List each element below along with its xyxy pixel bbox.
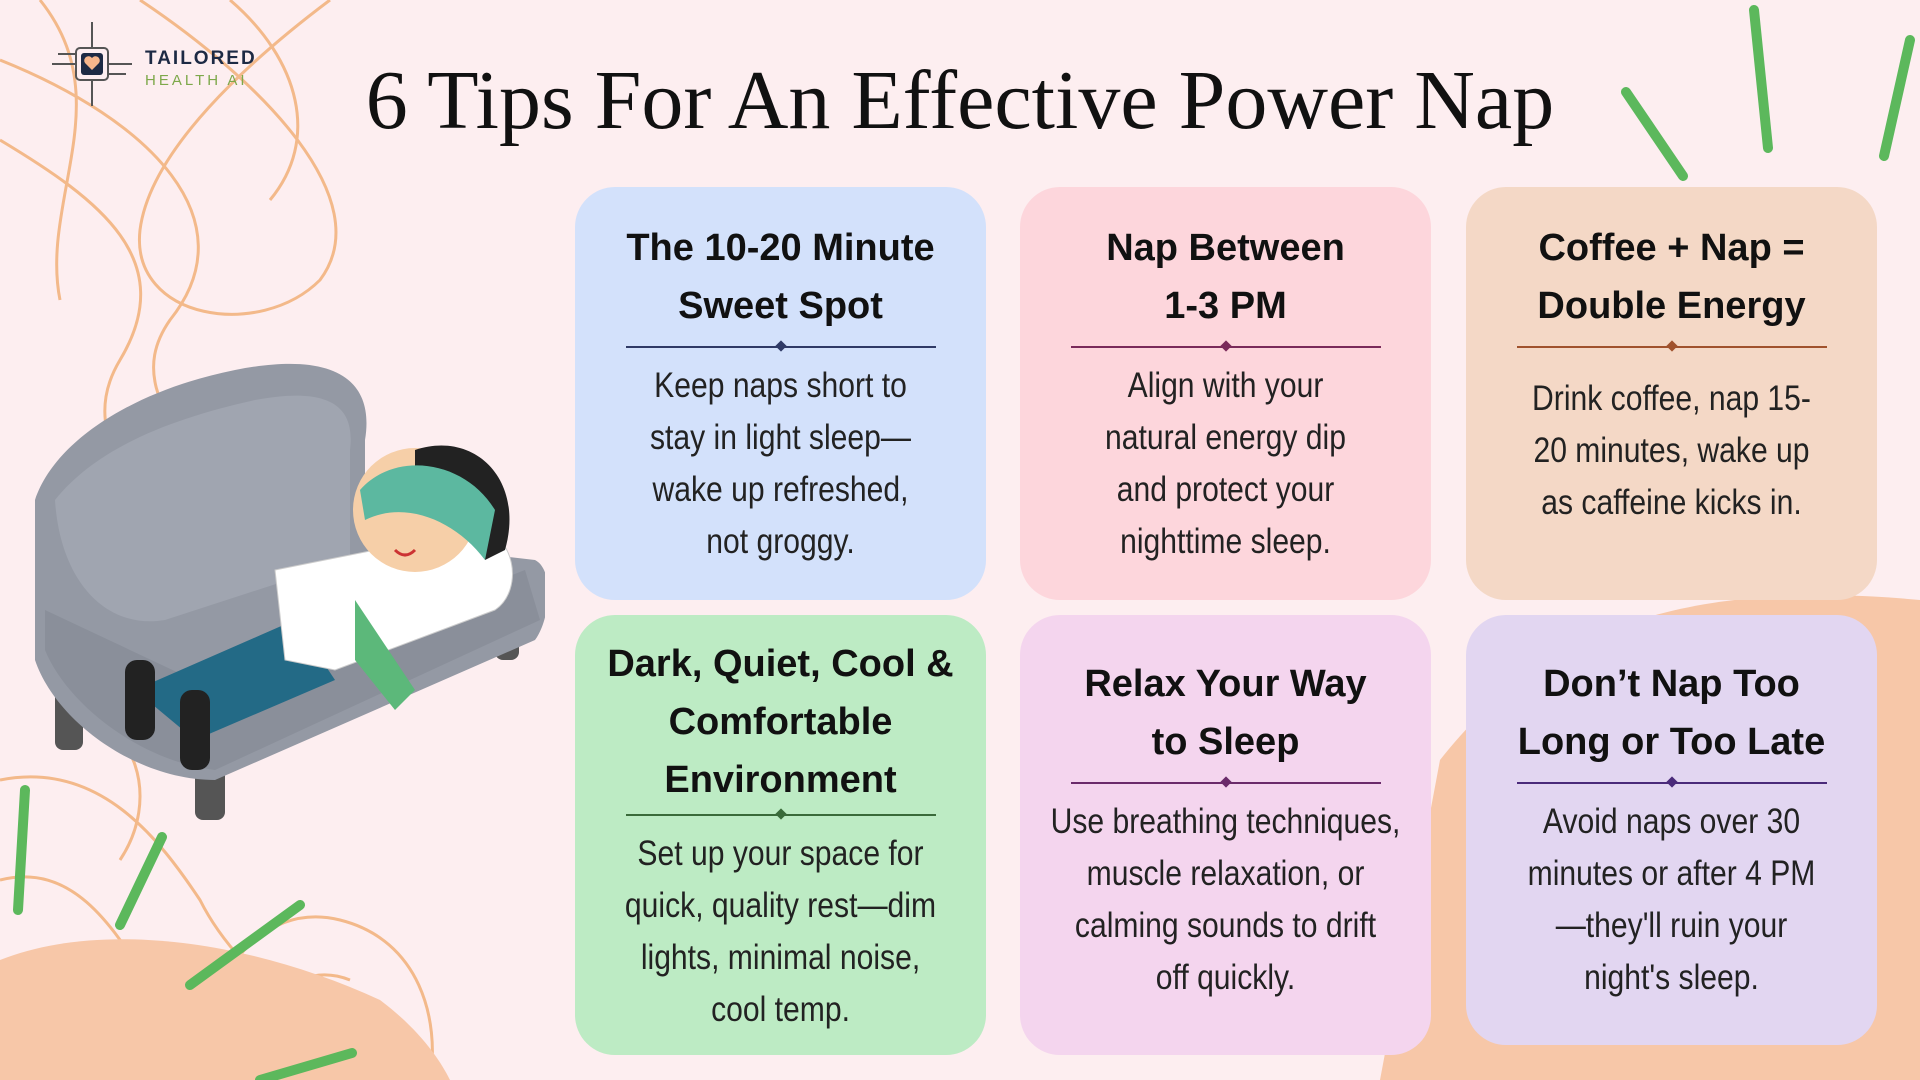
- card 1: [575, 187, 986, 600]
- card 4: Comfortable: [669, 701, 892, 743]
- title: 6 Tips For An Effective Power Nap: [366, 54, 1554, 147]
- card 4: Environment: [664, 759, 897, 801]
- card 2: Align with your: [1128, 366, 1323, 405]
- card 4: Set up your space for: [637, 834, 924, 873]
- card 1: The 10-20 Minute: [626, 227, 935, 269]
- card 3: Drink coffee, nap 15-: [1532, 379, 1811, 418]
- card 6: minutes or after 4 PM: [1528, 854, 1815, 893]
- card 4: cool temp.: [711, 990, 850, 1029]
- card 6: [1466, 615, 1877, 1045]
- card 6: Long or Too Late: [1518, 721, 1825, 763]
- card 5: muscle relaxation, or: [1087, 854, 1364, 893]
- card 2: natural energy dip: [1105, 418, 1346, 457]
- illustration: napping person on sofa: [35, 364, 545, 820]
- card 5: off quickly.: [1156, 958, 1295, 997]
- card 3: 20 minutes, wake up: [1533, 431, 1810, 470]
- card 4: quick, quality rest—dim: [625, 886, 936, 925]
- card 3: as caffeine kicks in.: [1541, 483, 1802, 522]
- card 1: Sweet Spot: [678, 285, 883, 327]
- card 3: Double Energy: [1537, 285, 1806, 327]
- card 2: 1-3 PM: [1164, 285, 1287, 327]
- card 1: not groggy.: [706, 522, 855, 561]
- logo: [52, 22, 257, 106]
- card 5: [1020, 615, 1431, 1055]
- card 3: Coffee + Nap =: [1538, 227, 1805, 269]
- card 5: Relax Your Way: [1084, 663, 1367, 705]
- card 4: lights, minimal noise,: [641, 938, 920, 977]
- card 6: night's sleep.: [1584, 958, 1759, 997]
- card 5: calming sounds to drift: [1075, 906, 1376, 945]
- card 6: —they'll ruin your: [1556, 906, 1787, 945]
- card 4: Dark, Quiet, Cool &: [607, 643, 954, 685]
- card 5: Use breathing techniques,: [1051, 802, 1400, 841]
- card 2: and protect your: [1117, 470, 1334, 509]
- card 1: wake up refreshed,: [652, 470, 908, 509]
- logo: HEALTH AI: [145, 72, 248, 89]
- card 6: Don’t Nap Too: [1543, 663, 1800, 705]
- logo: TAILORED: [145, 48, 257, 69]
- card 4: [575, 615, 986, 1055]
- card 6: Avoid naps over 30: [1543, 802, 1800, 841]
- card 2: nighttime sleep.: [1120, 522, 1331, 561]
- card 2: [1020, 187, 1431, 600]
- card 1: stay in light sleep—: [650, 418, 911, 457]
- card 3: [1466, 187, 1877, 600]
- card 1: Keep naps short to: [654, 366, 907, 405]
- card 2: Nap Between: [1106, 227, 1345, 269]
- card 5: to Sleep: [1152, 721, 1299, 763]
